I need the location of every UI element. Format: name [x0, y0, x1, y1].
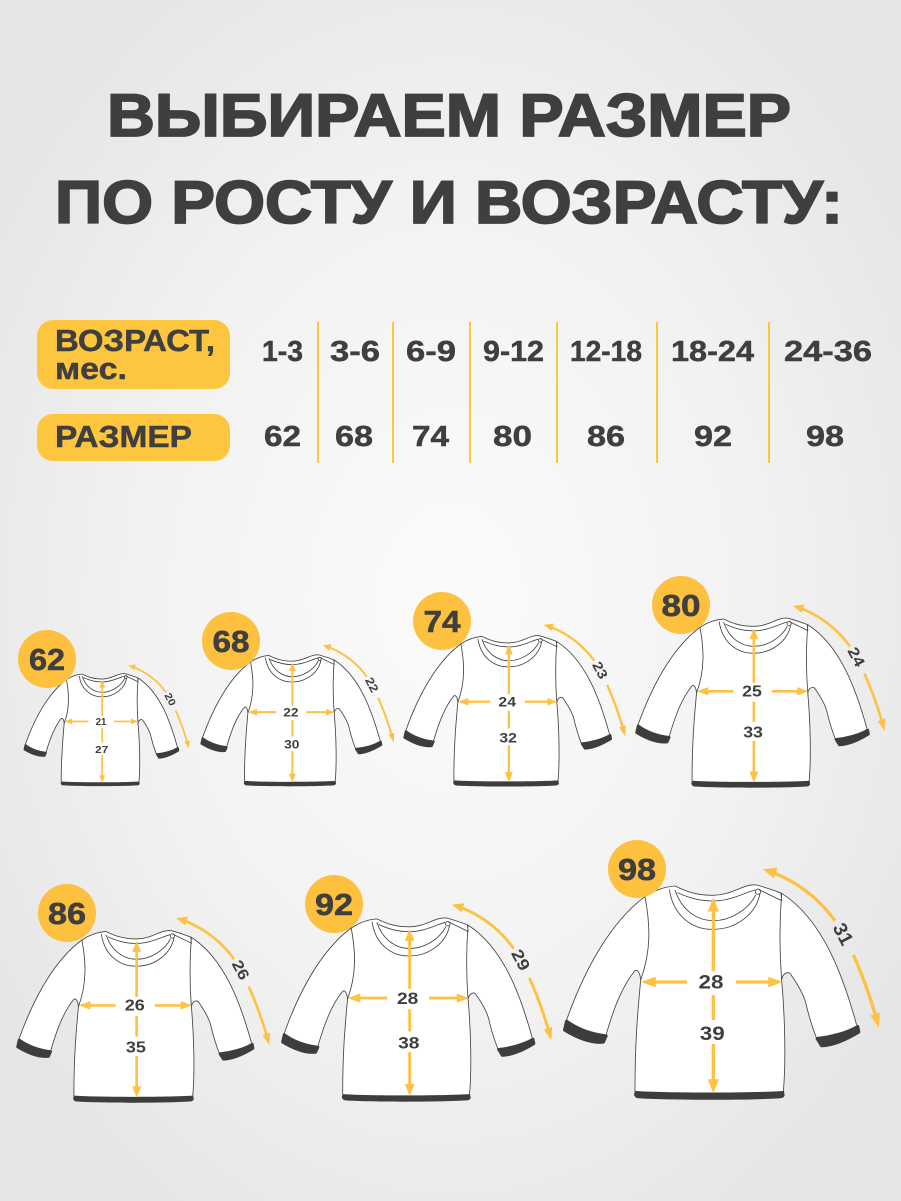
shirt size 68: 22: [283, 705, 299, 719]
row header: age: ВОЗРАСТ,: [55, 323, 215, 358]
shirt size 62: 27: [95, 745, 109, 756]
row header: age: мес.: [55, 351, 127, 386]
age values: 9-12: [483, 336, 544, 368]
size values: 80: [493, 421, 532, 453]
shirt size 80: [636, 576, 885, 788]
shirt size 74: [404, 592, 626, 787]
shirt size 92: 29: [507, 946, 534, 974]
shirt size 74: 32: [499, 730, 517, 745]
shirt size 86: 86: [48, 896, 86, 931]
shirt size 92: 92: [315, 887, 353, 922]
row header: size: РАЗМЕР: [55, 419, 192, 454]
age values: 1-3: [262, 336, 303, 368]
shirt size 62: 21: [96, 717, 107, 728]
size values: 62: [264, 421, 301, 453]
shirt size 86: 26: [228, 957, 252, 984]
size values: 92: [694, 421, 732, 453]
shirt size 74: 23: [589, 659, 611, 682]
shirt size 86: [17, 884, 270, 1103]
shirt size 98: 31: [828, 920, 857, 949]
shirt size 92: 28: [397, 989, 418, 1008]
shirt size 92: 38: [398, 1034, 419, 1053]
age values: 12-18: [570, 336, 642, 368]
age values: 24-36: [784, 336, 872, 368]
age values: 18-24: [671, 336, 754, 368]
size table: [37, 320, 872, 463]
age values: 6-9: [406, 336, 456, 368]
shirt size 68: [201, 612, 394, 786]
size values: [264, 421, 844, 453]
shirt size 68: 30: [284, 738, 300, 752]
shirt size 98: 28: [698, 973, 724, 994]
shirt size 62: [18, 630, 190, 786]
shirt size 80: 33: [743, 725, 763, 742]
shirt size 62: 20: [162, 691, 178, 708]
shirt size 98: [564, 840, 880, 1100]
age values: 3-6: [330, 336, 380, 368]
shirt size 74: 24: [498, 694, 517, 709]
shirt size 62: 62: [29, 642, 65, 677]
age values: [262, 336, 872, 368]
size values: 74: [412, 421, 449, 453]
shirt size 86: 35: [126, 1040, 146, 1057]
title: ВЫБИРАЕМ РАЗМЕР: [107, 82, 791, 149]
shirt size 74: 74: [424, 604, 461, 639]
shirt size 68: 22: [362, 675, 382, 695]
shirt size 80: 80: [662, 588, 700, 623]
row header: size: [37, 414, 230, 461]
shirt size 98: 98: [618, 852, 656, 887]
shirt size 80: 24: [844, 645, 868, 670]
shirt size 68: 68: [212, 624, 250, 659]
size values: 86: [587, 421, 625, 453]
title: ПО РОСТУ И ВОЗРАСТУ:: [55, 169, 843, 236]
shirt size 86: 26: [125, 998, 145, 1015]
row header: age: [37, 320, 230, 389]
shirt size 98: 39: [700, 1024, 725, 1045]
title: [55, 82, 843, 236]
shirt size 80: 25: [742, 684, 762, 701]
shirt size 92: [282, 875, 552, 1102]
size values: 68: [335, 421, 373, 453]
size values: 98: [806, 421, 844, 453]
